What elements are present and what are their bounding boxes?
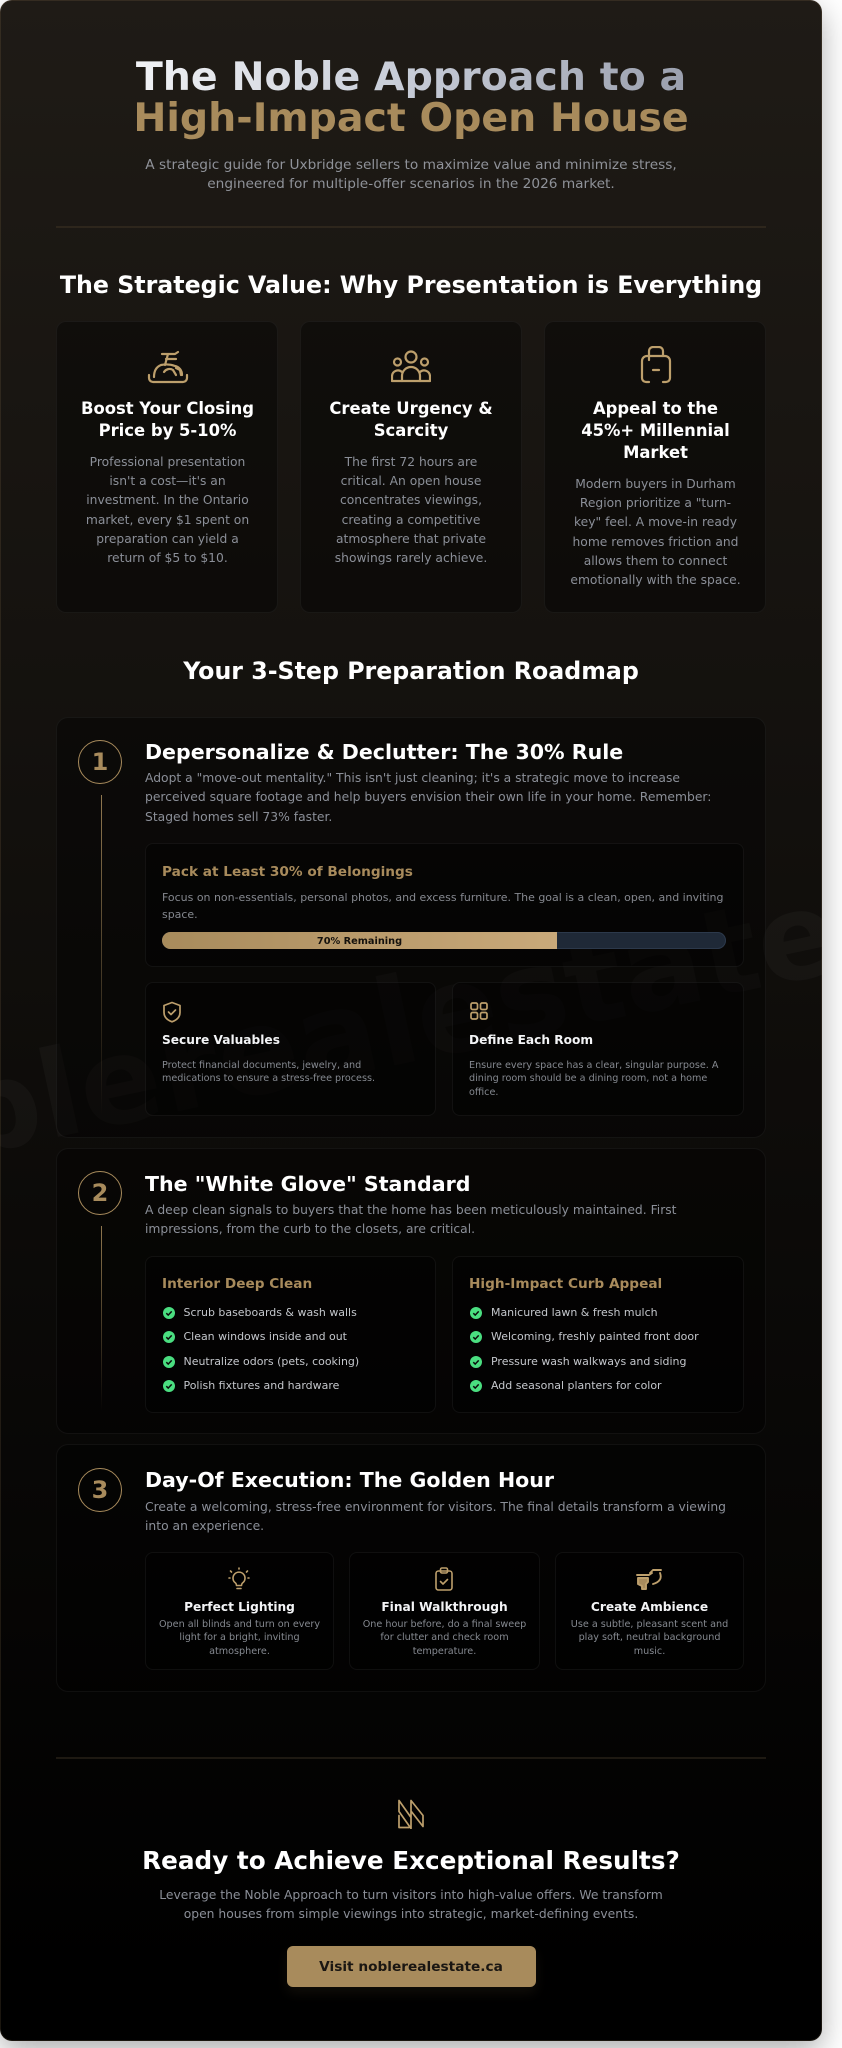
item: Scrub baseboards & wash walls <box>184 1306 357 1319</box>
icon: light bulb <box>228 1567 250 1590</box>
panel: millennial market <box>544 321 766 613</box>
text: for clutter and check room <box>380 1632 509 1643</box>
progress fill 70%: 70% Remaining <box>317 936 402 946</box>
card text: return of $5 to $10. <box>107 551 228 565</box>
panel: step 1 <box>56 717 766 1138</box>
icon: clipboard check <box>435 1567 453 1591</box>
checklist <box>470 1306 699 1392</box>
check icon <box>470 1356 482 1368</box>
card text: creating a competitive <box>342 512 480 526</box>
sub panel: pack belongings <box>145 843 744 967</box>
sub panel: define room <box>452 982 744 1116</box>
panel: urgency and scarcity <box>300 321 522 613</box>
step title: Depersonalize & Declutter: The 30% Rule <box>145 740 623 764</box>
item: Neutralize odors (pets, cooking) <box>184 1355 359 1368</box>
card text: Modern buyers in Durham <box>575 477 736 491</box>
title: Perfect Lighting <box>184 1600 295 1614</box>
title: Define Each Room <box>469 1033 593 1047</box>
text: dining room should be a dining room, not a home <box>469 1073 707 1084</box>
card text: allows them to connect <box>584 554 727 568</box>
step number 2 <box>78 1171 122 1215</box>
text: office. <box>469 1087 498 1098</box>
icon: noble logo <box>398 1800 424 1829</box>
check icon <box>163 1307 175 1319</box>
closing text <box>159 1888 663 1921</box>
step text <box>145 1500 726 1533</box>
card text: Professional presentation <box>90 455 245 469</box>
item: Polish fixtures and hardware <box>184 1379 339 1392</box>
step number 2: 2 <box>92 1179 108 1207</box>
sub panel: curb appeal <box>452 1256 744 1413</box>
step title: Day-Of Execution: The Golden Hour <box>145 1468 554 1492</box>
card text: concentrates viewings, <box>340 493 482 507</box>
step title: The "White Glove" Standard <box>145 1172 470 1196</box>
check icon <box>470 1380 482 1392</box>
title: The Noble Approach to a <box>136 54 686 100</box>
card title: Boost Your Closing <box>81 399 254 418</box>
check icon <box>163 1356 175 1368</box>
step number 3: 3 <box>92 1476 108 1504</box>
text: Open all blinds and turn on every <box>159 1619 320 1630</box>
step text: Create a welcoming, stress-free environment for visitors. The final details transform a viewing <box>145 1500 726 1514</box>
progress fill 70% <box>162 932 557 949</box>
text: Use a subtle, pleasant scent and <box>571 1619 728 1630</box>
icon: grid <box>470 1002 488 1020</box>
step text: into an experience. <box>145 1519 264 1533</box>
checklist <box>163 1306 359 1392</box>
sub panel: interior deep clean <box>145 1256 436 1413</box>
title <box>133 54 689 141</box>
icon: group of people <box>391 350 431 382</box>
step text: A deep clean signals to buyers that the home has been meticulously maintained. First <box>145 1203 677 1217</box>
card title: Scarcity <box>374 421 448 440</box>
card text: showings rarely achieve. <box>335 551 487 565</box>
item: Clean windows inside and out <box>184 1330 347 1343</box>
check icon <box>163 1380 175 1392</box>
card text: Region prioritize a "turn- <box>580 496 731 510</box>
card title: 45%+ Millennial <box>581 421 730 440</box>
sub panel: final walkthrough <box>349 1552 540 1670</box>
card text: isn't a cost—it's an <box>109 474 226 488</box>
subtitle: engineered for multiple-offer scenarios in the 2026 market. <box>207 176 615 192</box>
closing heading: Ready to Achieve Exceptional Results? <box>142 1846 680 1874</box>
text: atmosphere. <box>209 1646 270 1657</box>
card text: market, every $1 spent on <box>86 512 249 526</box>
title: Interior Deep Clean <box>162 1276 312 1292</box>
step text: impressions, from the curb to the closets, are critical. <box>145 1222 475 1236</box>
heading: roadmap: Your 3-Step Preparation Roadmap <box>183 656 639 684</box>
text <box>571 1619 728 1657</box>
connector line <box>100 795 102 1115</box>
footer divider <box>56 1757 766 1759</box>
progress bar <box>162 932 726 949</box>
card text: preparation can yield a <box>96 532 239 546</box>
sub panel: secure valuables <box>145 982 436 1116</box>
closing text: open houses from simple viewings into strategic, market-defining events. <box>184 1907 638 1921</box>
title: High-Impact Curb Appeal <box>469 1276 662 1292</box>
icon: luggage <box>640 346 672 384</box>
sub panel title: Pack at Least 30% of Belongings <box>162 864 413 880</box>
card text: emotionally with the space. <box>570 573 741 587</box>
step number 1 <box>78 740 122 784</box>
sub panel: perfect lighting <box>145 1552 334 1670</box>
card text: The first 72 hours are <box>345 455 477 469</box>
text: play soft, neutral background <box>579 1632 720 1643</box>
closing text: Leverage the Noble Approach to turn visitors into high-value offers. We transform <box>159 1888 663 1902</box>
button: Visit noblerealestate.ca <box>319 1958 503 1974</box>
sub panel: create ambience <box>555 1552 744 1670</box>
text <box>159 1619 320 1657</box>
step text: Staged homes sell 73% faster. <box>145 810 332 824</box>
card text <box>570 477 741 587</box>
card text: key" feel. A move-in ready <box>574 515 737 529</box>
panel: boost closing price <box>56 321 278 613</box>
check icon <box>163 1331 175 1343</box>
title: Secure Valuables <box>162 1033 280 1047</box>
heading: strategic value: The Strategic Value: Why Presentation is Everything <box>60 270 762 298</box>
button <box>286 1946 536 1987</box>
title: High-Impact Open House <box>133 95 689 141</box>
step text <box>145 1203 677 1236</box>
item: Add seasonal planters for color <box>491 1379 662 1392</box>
step text: perceived square footage and help buyers envision their own life in your home. Remember: <box>145 790 711 804</box>
text: Protect financial documents, jewelry, and <box>162 1060 361 1071</box>
subtitle <box>145 156 677 192</box>
subtitle: A strategic guide for Uxbridge sellers to maximize value and minimize stress, <box>145 156 677 172</box>
panel: step 3 <box>56 1444 766 1692</box>
text: temperature. <box>413 1646 476 1657</box>
step number 3 <box>78 1468 122 1512</box>
check icon <box>470 1307 482 1319</box>
title: Create Ambience <box>591 1600 708 1614</box>
card title <box>81 399 254 440</box>
item: Pressure wash walkways and siding <box>491 1355 686 1368</box>
card text: critical. An open house <box>341 474 481 488</box>
text <box>469 1060 718 1098</box>
card title <box>581 399 730 462</box>
card title: Create Urgency & <box>329 399 493 418</box>
text <box>363 1619 526 1657</box>
sub panel text: space. <box>162 908 198 921</box>
icon: shield check <box>163 1002 181 1023</box>
icon: hand with tray <box>148 350 188 384</box>
text: light for a bright, inviting <box>179 1632 300 1643</box>
connector line <box>100 1226 102 1411</box>
text: medications to ensure a stress-free process. <box>162 1073 375 1084</box>
step number 1: 1 <box>92 748 108 776</box>
card text <box>335 455 487 565</box>
item: Welcoming, freshly painted front door <box>491 1330 699 1343</box>
step text: Adopt a "move-out mentality." This isn't just cleaning; it's a strategic move to increase <box>145 771 680 785</box>
step text <box>145 771 711 824</box>
text: music. <box>634 1646 665 1657</box>
panel: step 2 <box>56 1148 766 1434</box>
card title: Market <box>623 443 688 462</box>
card text: investment. In the Ontario <box>86 493 249 507</box>
title: Final Walkthrough <box>381 1600 508 1614</box>
text: One hour before, do a final sweep <box>363 1619 526 1630</box>
sub panel text: Focus on non-essentials, personal photos, and excess furniture. The goal is a clean, open, and inviting <box>162 891 723 904</box>
card text: home removes friction and <box>573 534 738 548</box>
text <box>162 1060 375 1084</box>
card text <box>86 455 249 565</box>
card title: Appeal to the <box>593 399 718 418</box>
card text: atmosphere that private <box>336 532 486 546</box>
check icon <box>470 1331 482 1343</box>
icon: ambience <box>636 1569 662 1590</box>
text: Ensure every space has a clear, singular purpose. A <box>469 1060 718 1071</box>
sub panel text <box>162 891 723 921</box>
header divider <box>56 226 766 228</box>
item: Manicured lawn & fresh mulch <box>491 1306 658 1319</box>
card title <box>329 399 493 440</box>
card title: Price by 5-10% <box>99 421 236 440</box>
